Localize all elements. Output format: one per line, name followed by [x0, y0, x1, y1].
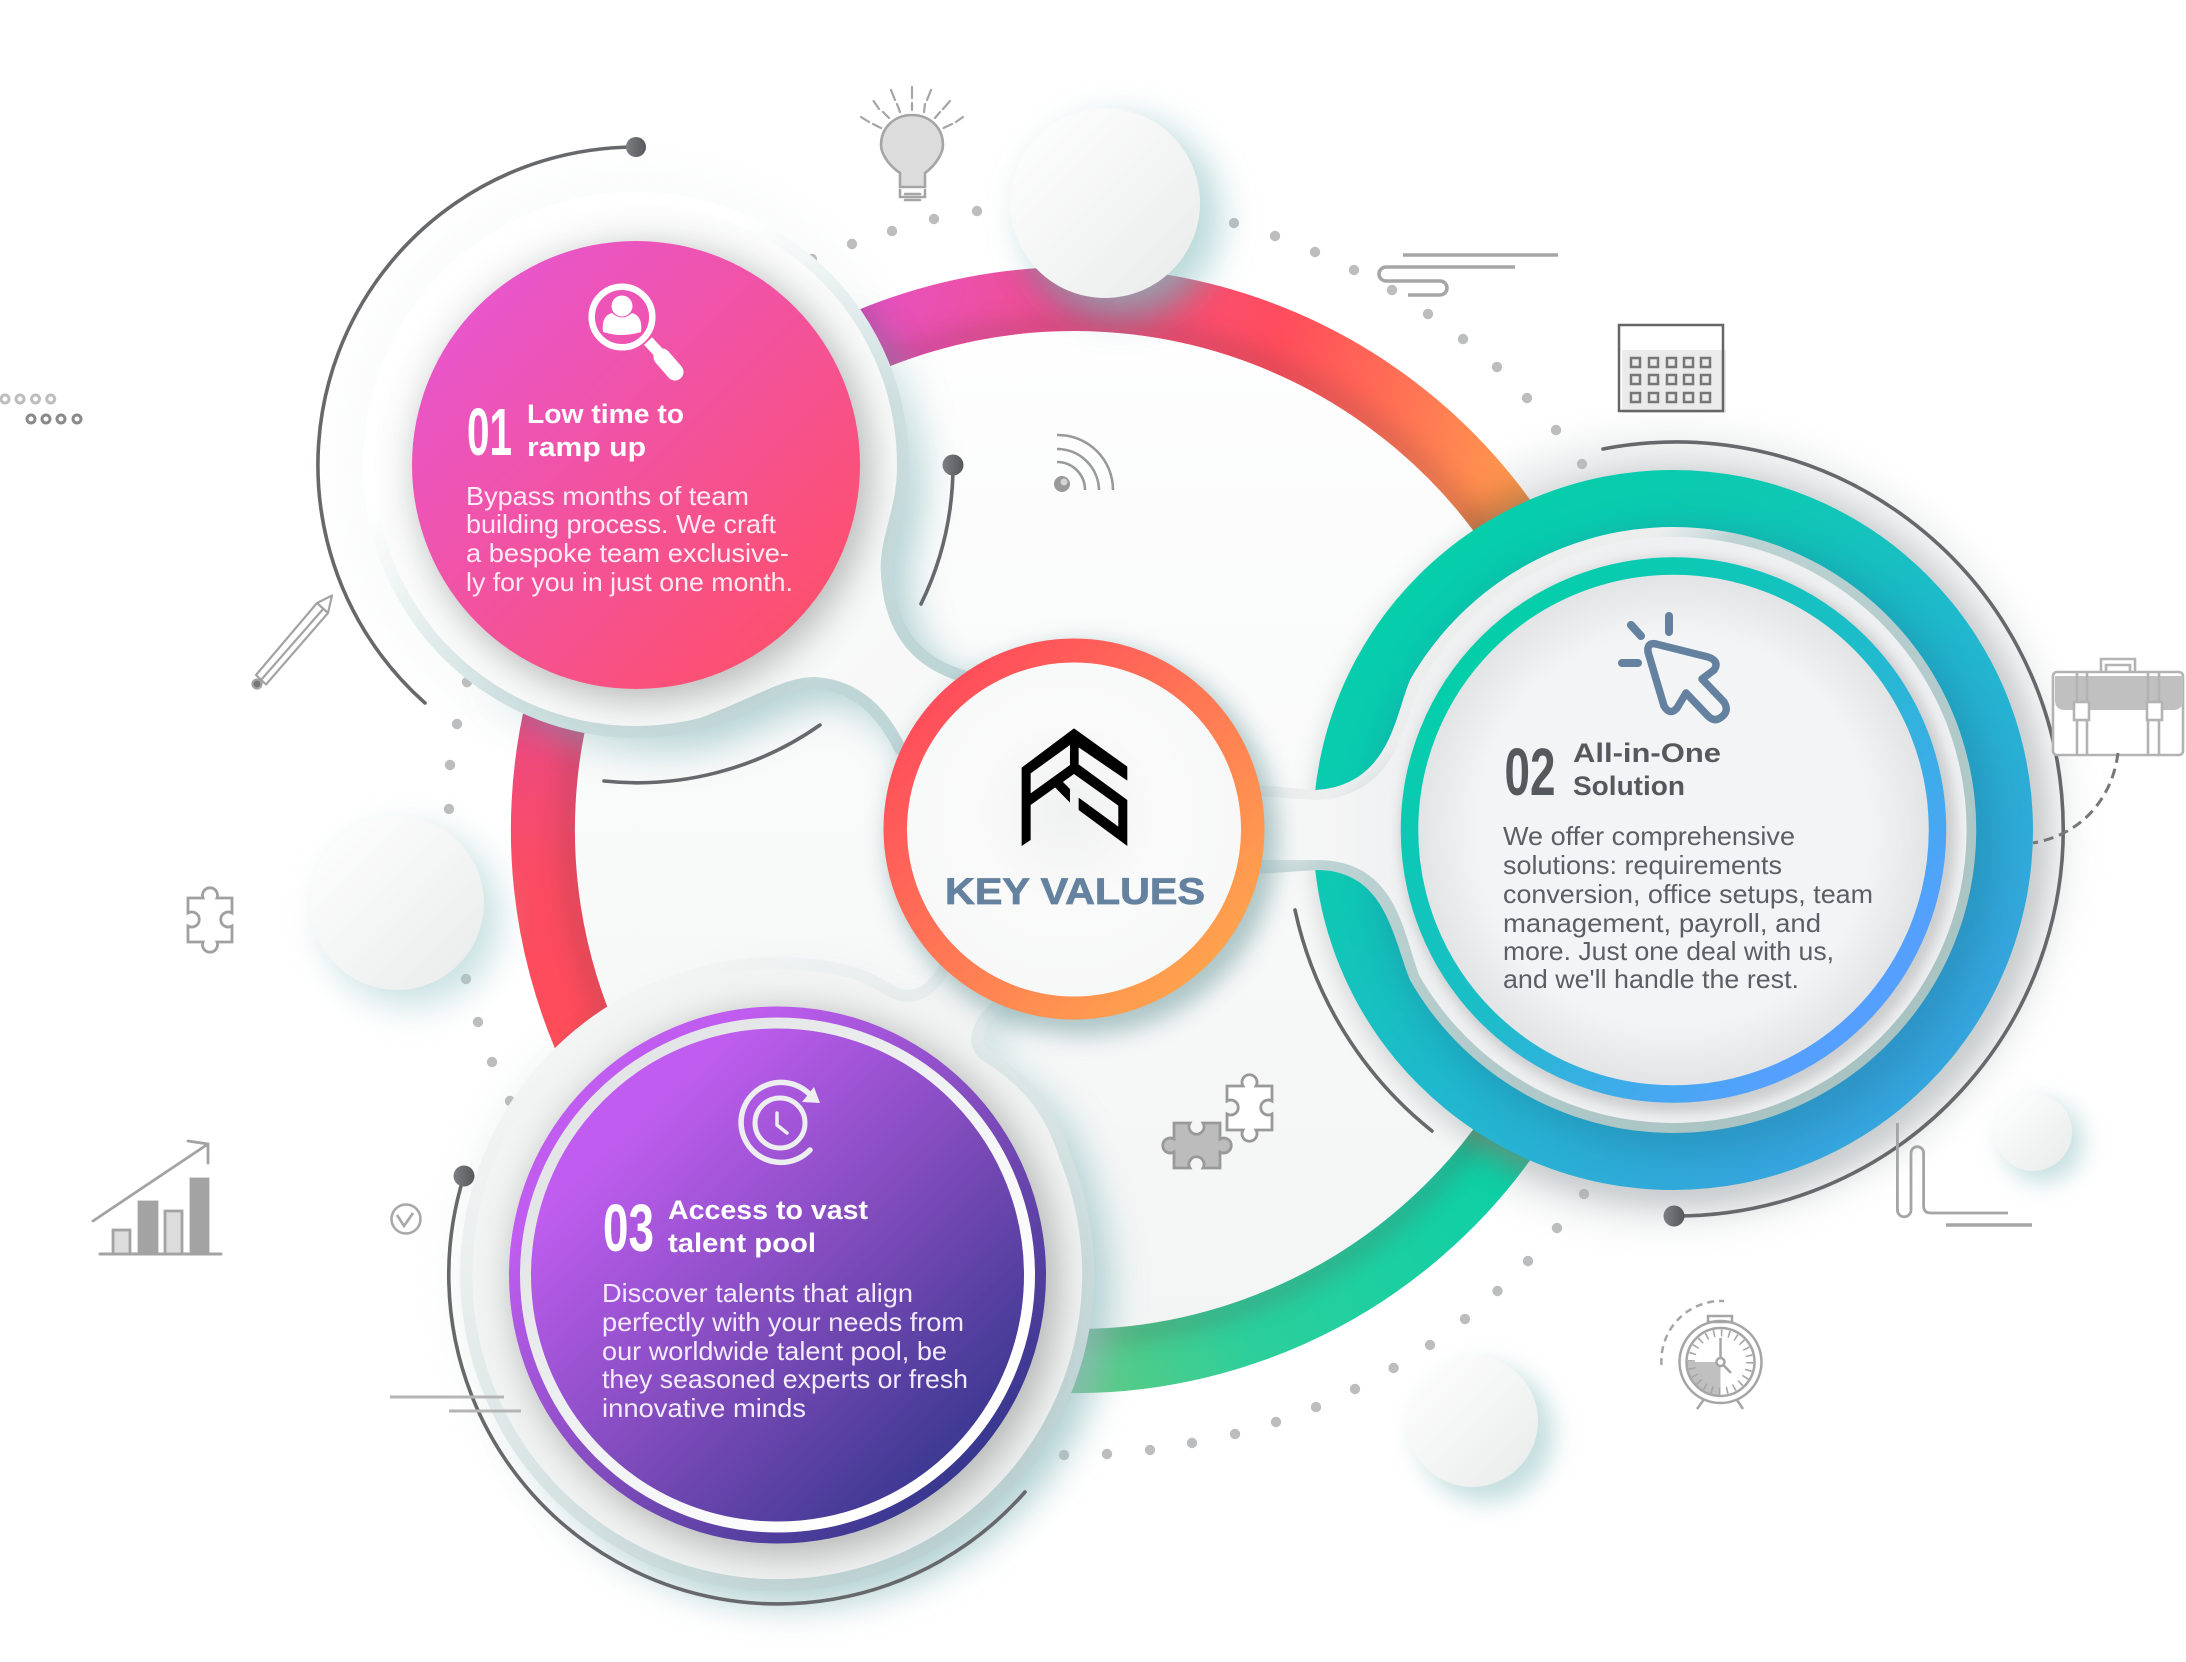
icon: two short lines [390, 1397, 521, 1411]
icon: puzzle pair [1163, 1075, 1272, 1168]
dotted orbit [444, 206, 1589, 1460]
arc: around panel 01 [318, 137, 964, 783]
logo mark [1022, 728, 1127, 846]
ring shading [520, 268, 1530, 1393]
heading 01: ramp up [527, 432, 646, 462]
icon: check circle [392, 1204, 420, 1234]
dashed connector: briefcase to panel [2033, 753, 2118, 843]
body text 03: innovative minds [602, 1393, 806, 1423]
icon: briefcase [2053, 659, 2183, 755]
icon: light bulb [861, 87, 963, 200]
icon: wifi signal [1054, 435, 1113, 492]
left arc: red [543, 648, 733, 1237]
body text 02: more. Just one deal with us, [1503, 936, 1834, 966]
arc: around panel 03 [449, 1166, 1025, 1604]
body text 03: Discover talents that align [602, 1278, 913, 1308]
center title: KEY VALUES [945, 870, 1205, 912]
panel 01: Low time to ramp up [412, 241, 872, 702]
thin orbit arcs with end dots [318, 137, 2063, 1604]
heading 02 [1573, 738, 1721, 801]
body text 02: management, payroll, and [1503, 908, 1821, 938]
center badge [884, 638, 1278, 1035]
main ring arcs [543, 299, 1534, 1361]
icon: bar chart with arrow [93, 1141, 221, 1254]
heading 03: Access to vast [668, 1195, 868, 1225]
icon: cursor click [1622, 616, 1726, 720]
halo: panel 02 with neck [1200, 527, 1976, 1133]
body text 03: they seasoned experts or fresh [602, 1364, 968, 1394]
body text 01 [466, 481, 793, 597]
icon: magnifier with person [592, 287, 675, 372]
body text 03 [602, 1278, 968, 1423]
body text 02: and we'll handle the rest. [1503, 964, 1799, 994]
number 02: 02 [1504, 735, 1556, 810]
top arc: magenta to orange [733, 299, 1534, 564]
bottom arc: green [892, 1096, 1534, 1361]
icon: small ring dots [1, 395, 81, 423]
icon: paper clip lines right [1897, 1123, 2032, 1225]
icon: pencil [252, 596, 332, 688]
inner disc of main ring [569, 325, 1579, 1335]
body text 02: We offer comprehensive [1503, 821, 1795, 851]
bubble: right small [1994, 1093, 2083, 1182]
icon: puzzle piece left [188, 888, 232, 952]
halo: panel 01 with neck [375, 204, 1090, 843]
body text 03: perfectly with your needs from [602, 1307, 964, 1337]
icon: clock with cycle arrow [741, 1082, 820, 1162]
body text 01: building process. We craft [466, 509, 777, 539]
soft halo glows [336, 165, 2068, 1606]
heading 01: Low time to [527, 399, 684, 429]
icon: calendar [1619, 325, 1726, 413]
halo: panel 03 with neck [472, 829, 1098, 1593]
bubble: left [310, 816, 500, 1006]
heading 03: talent pool [668, 1228, 816, 1258]
heading 02: All-in-One [1573, 738, 1721, 768]
body text 01: a bespoke team exclusive- [466, 538, 789, 568]
bubble: top [1010, 108, 1220, 316]
icon: paper clip lines top [1379, 255, 1558, 295]
number 03: 03 [603, 1191, 654, 1266]
body text 02 [1503, 821, 1873, 994]
body text 03: our worldwide talent pool, be [602, 1336, 947, 1366]
body text 02: conversion, office setups, team [1503, 879, 1873, 909]
heading 02: Solution [1573, 771, 1685, 801]
body text 01: ly for you in just one month. [466, 567, 793, 597]
heading 01 [527, 399, 684, 462]
panel 02 backing: teal disc [1312, 470, 2048, 1206]
panel 03: Access to vast talent pool [509, 1006, 1059, 1557]
body text 01: Bypass months of team [466, 481, 749, 511]
heading 03 [668, 1195, 868, 1258]
number 01: 01 [467, 395, 512, 470]
panel 02: All-in-One Solution [1400, 557, 1956, 1113]
decorative bubbles [310, 108, 2083, 1502]
bubble: bottom [1406, 1355, 1554, 1502]
icon: stopwatch [1661, 1301, 1762, 1409]
arc: around panel 02 [1295, 442, 2063, 1227]
body text 02: solutions: requirements [1503, 850, 1782, 880]
